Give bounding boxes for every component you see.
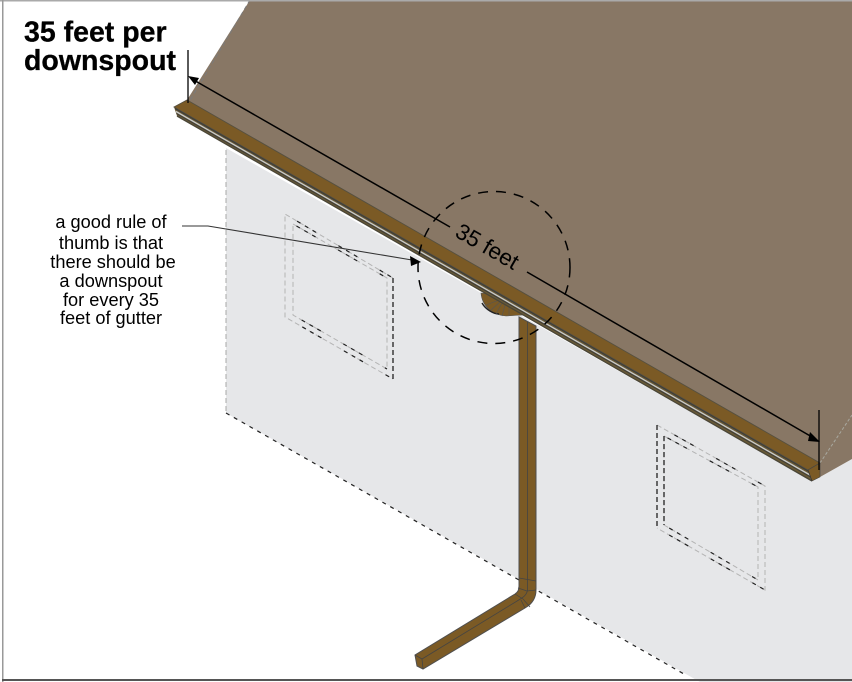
callout text: there should be [50,252,176,272]
gutter [174,100,820,481]
callout text: a good rule of [55,212,168,232]
house wall [226,148,852,682]
dimension line: 35 feet across gutter [188,50,820,470]
downspout outlet [481,293,536,316]
callout leader line with arrow [182,226,421,266]
callout text: feet of gutter [60,308,162,328]
title: 35 feet per [24,16,167,48]
callout text [50,212,176,328]
window: right [657,425,765,590]
callout text: a downspout [59,271,163,291]
label: 35 feet: 35 feet [451,219,524,275]
title [24,16,176,77]
callout text: for every 35 [63,290,159,310]
window: left [285,214,393,379]
title: downspout [24,45,176,77]
downspout [415,317,536,669]
roof [187,0,852,477]
callout text: thumb is that [59,233,163,253]
dashed circle highlight [418,192,570,344]
